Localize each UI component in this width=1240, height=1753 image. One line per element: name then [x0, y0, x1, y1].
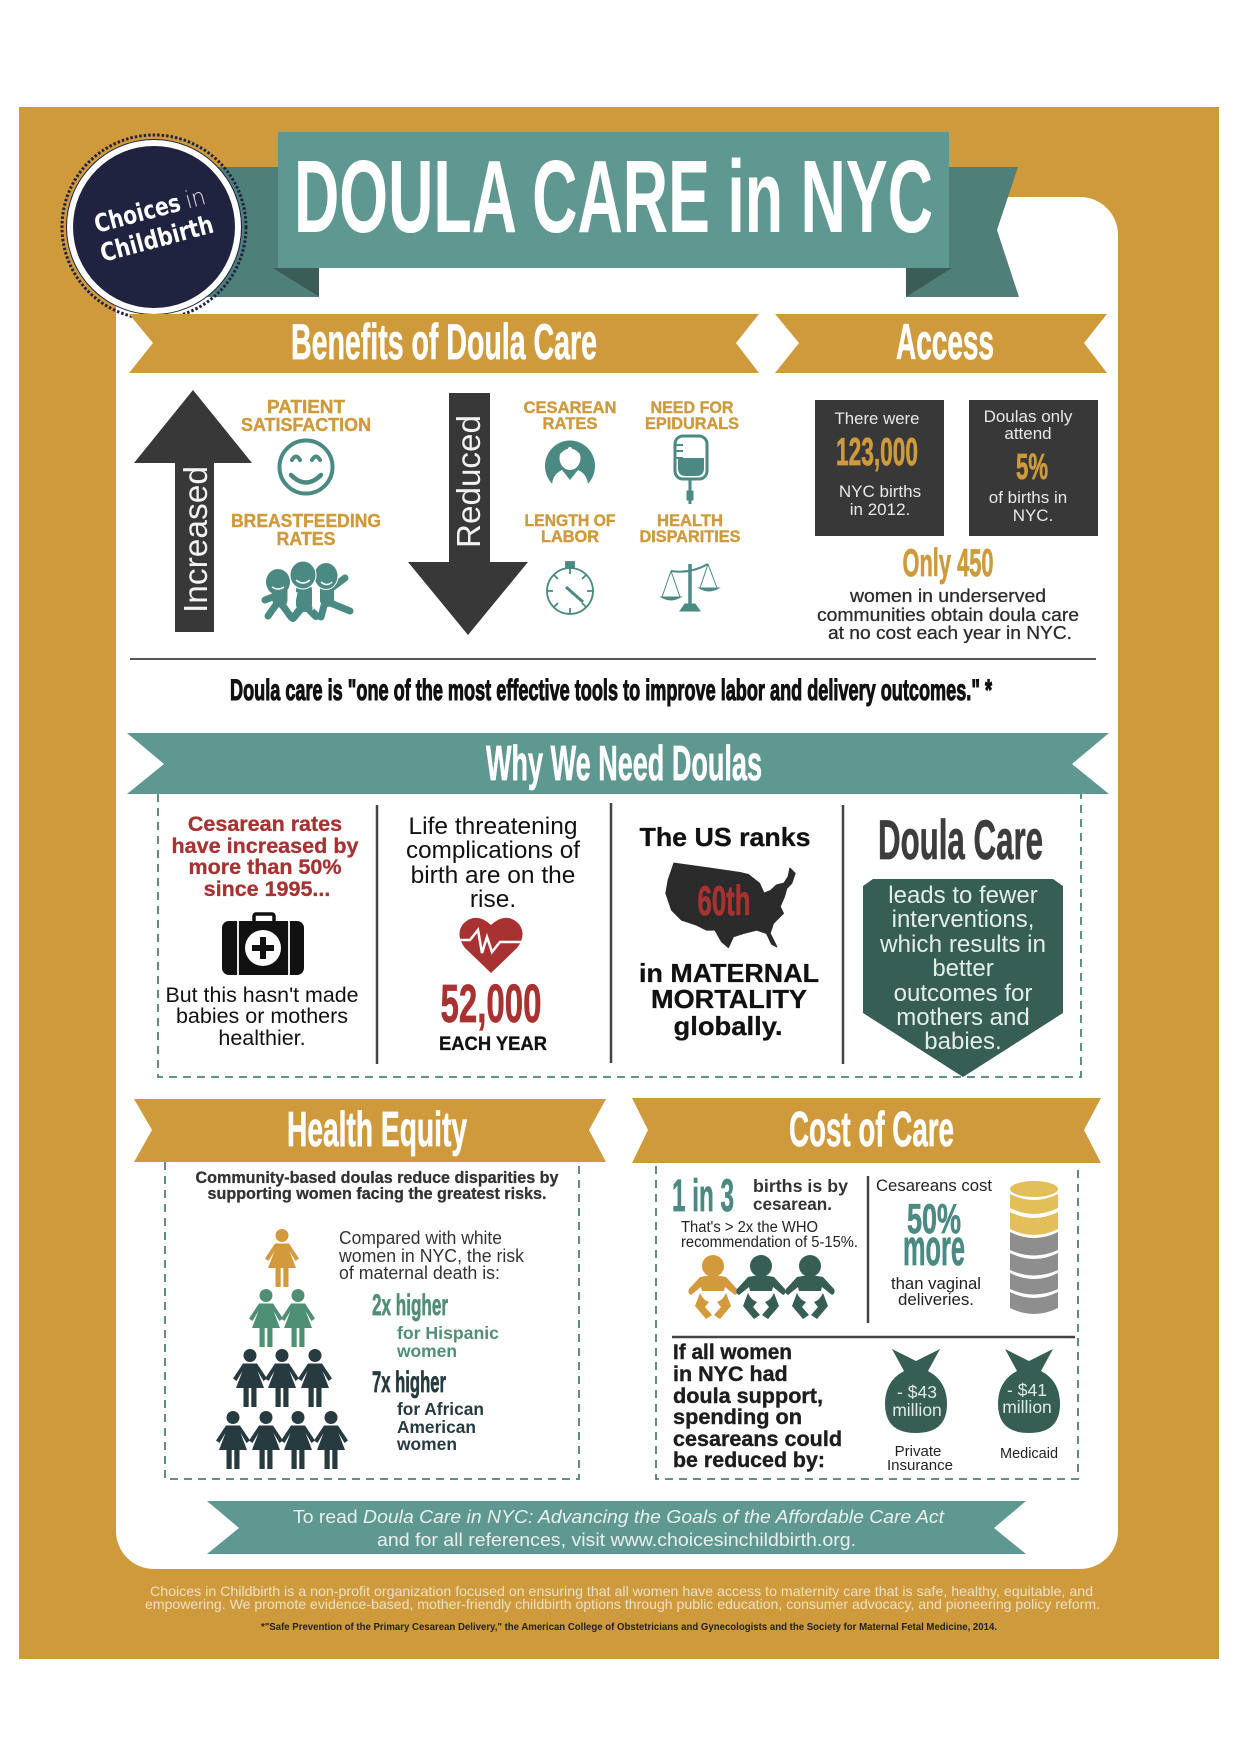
- left ribbon tail: [200, 167, 319, 297]
- comparison text: of maternal death is:: [339, 1263, 500, 1283]
- logo: Choices in Childbirth: Choices: [91, 188, 184, 239]
- logo: Choices in Childbirth: in: [182, 182, 209, 214]
- label: breastfeeding rates: RATES: [276, 529, 336, 549]
- white content panel: [116, 197, 1118, 1569]
- column: doula care shield: babies.: [924, 1028, 1002, 1055]
- heading ribbon: why we need doulas: Why We Need Doulas: [486, 737, 762, 791]
- stat: only 450: women in underserved: [849, 585, 1046, 606]
- column: US ranks 60th: MORTALITY: [651, 984, 807, 1014]
- stat box: 123,000 births: NYC births: [839, 482, 921, 501]
- icon: doctor: [545, 440, 595, 492]
- label: need for epidurals: NEED FOR: [650, 399, 734, 417]
- label: length of labor: LENGTH OF: [524, 512, 616, 530]
- money bag: private insurance: million: [892, 1400, 942, 1420]
- money bag: medicaid: million: [1002, 1397, 1052, 1417]
- call to action ribbon: and for all references, visit www.choicesinchildbirth.org.: [377, 1529, 856, 1550]
- stat box: 5 percent: [969, 400, 1098, 536]
- heading ribbon: access: [775, 314, 1107, 373]
- left ribbon fold: [272, 268, 319, 297]
- money bag: private insurance: Private: [895, 1443, 941, 1460]
- icon: coin stack: [1010, 1181, 1058, 1314]
- label: breastfeeding rates: [231, 511, 381, 549]
- stat: 50 percent more: than vaginal: [891, 1275, 981, 1293]
- map: United States: [666, 863, 795, 947]
- stat: only 450: at no cost each year in NYC.: [828, 622, 1072, 643]
- stat: 50 percent more: Cesareans cost: [876, 1177, 992, 1195]
- stat: 2x higher: for Hispanic: [397, 1323, 499, 1343]
- stat box: 123,000 births: There were: [834, 409, 920, 428]
- column: US ranks 60th: The US ranks: [640, 822, 810, 852]
- logo: Choices in Childbirth: [62, 135, 246, 319]
- title banner: [200, 132, 1019, 297]
- stat: 1 in 3: recommendation of 5-15%.: [681, 1234, 858, 1251]
- savings text: If all women: [673, 1340, 792, 1364]
- label: health disparities: HEALTH: [657, 512, 723, 530]
- stat box: 5 percent: NYC.: [1013, 506, 1053, 525]
- column: US ranks 60th: in MATERNAL: [639, 958, 819, 988]
- intro text: [196, 1169, 559, 1203]
- title plate: [278, 132, 949, 268]
- stat: 50 percent more: 50%: [907, 1195, 961, 1242]
- stat: 1 in 3: That's > 2x the WHO: [681, 1219, 818, 1236]
- panel: why we need doulas: [127, 733, 1109, 1077]
- column: doula care shield: [863, 808, 1063, 1077]
- stat box: 123,000 births: [815, 400, 944, 536]
- money bag: medicaid: - $41: [1007, 1380, 1047, 1400]
- heading ribbon: health equity: [134, 1099, 606, 1162]
- column: cesarean rates increased: more than 50%: [189, 855, 341, 879]
- stat box: 5 percent: Doulas only: [984, 407, 1073, 426]
- stat: only 450: communities obtain doula care: [817, 604, 1079, 625]
- footer text: [145, 1583, 1100, 1633]
- stat: only 450: Only 450: [902, 542, 994, 585]
- column: doula care shield: interventions,: [892, 906, 1034, 933]
- column: complications: [406, 813, 580, 1055]
- stat: 50 percent more: deliveries.: [898, 1291, 974, 1309]
- stat box: 123,000 births: in 2012.: [850, 500, 910, 519]
- footer text: empowering. We promote evidence-based, mother-friendly childbirth options through public education, consumer advocacy, and pioneering policy reform.: [145, 1596, 1100, 1612]
- call to action ribbon: [207, 1501, 1026, 1554]
- panel: benefits of doula care: [129, 314, 759, 635]
- stat: 1 in 3: cesarean.: [753, 1194, 832, 1214]
- stat: 1 in 3: 1 in 3: [672, 1170, 734, 1221]
- stat: 7x higher: women: [396, 1434, 457, 1454]
- icon: IV bag: [675, 436, 707, 504]
- column: US ranks 60th: globally.: [674, 1011, 782, 1041]
- label: health disparities: [640, 512, 740, 546]
- column: doula care shield: which results in: [879, 931, 1046, 958]
- heading ribbon: cost of care: [632, 1098, 1101, 1163]
- stat: 1 in 3: births is by: [753, 1176, 848, 1196]
- icon: first aid kit: [222, 914, 304, 975]
- column: doula care shield: outcomes for: [894, 980, 1032, 1007]
- label: patient satisfaction: SATISFACTION: [241, 415, 371, 435]
- stat: 2x higher: 2x higher: [372, 1289, 448, 1322]
- pictogram: women pyramid: [216, 1229, 348, 1469]
- stat box: 5 percent: 5%: [1016, 446, 1048, 487]
- money bag: private insurance: Insurance: [887, 1457, 953, 1474]
- intro text: supporting women facing the greatest risks.: [208, 1185, 546, 1203]
- stat: 7x higher: [372, 1366, 484, 1454]
- savings text: cesareans could: [673, 1427, 842, 1451]
- arrow: reduced: [408, 393, 528, 635]
- stat: 7x higher: 7x higher: [372, 1366, 446, 1399]
- column: doula care shield: better: [932, 955, 994, 982]
- column: cesarean rates increased: have increased by: [172, 834, 359, 858]
- column: complications: Life threatening: [409, 813, 577, 840]
- icon: heart with pulse: [459, 918, 523, 973]
- column: cesarean rates increased: babies or mothers: [176, 1004, 348, 1028]
- stat: 50 percent more: [876, 1177, 992, 1309]
- savings text: doula support,: [673, 1384, 823, 1408]
- stat: 7x higher: for African: [397, 1399, 484, 1419]
- stat: 7x higher: American: [397, 1417, 476, 1437]
- panel: cost of care: [632, 1098, 1101, 1479]
- stat: 50 percent more: more: [903, 1219, 965, 1276]
- icon: scales: [661, 564, 719, 611]
- heading ribbon: why we need doulas: [127, 733, 1109, 794]
- pictogram: three babies: [688, 1255, 835, 1319]
- icon: smiley face: [280, 440, 332, 494]
- money bag: medicaid: Medicaid: [1000, 1445, 1058, 1462]
- footer text: Choices in Childbirth is a non-profit organization focused on ensuring that all women have access to maternity care that is safe, healthy, equitable, and: [150, 1583, 1093, 1599]
- column: complications: 52,000: [440, 974, 542, 1034]
- arrow: reduced: Reduced: [450, 415, 487, 548]
- savings text: spending on: [673, 1405, 802, 1429]
- comparison text: [338, 1228, 525, 1283]
- logo: Choices in Childbirth: Childbirth: [97, 210, 217, 268]
- label: health disparities: DISPARITIES: [640, 528, 740, 546]
- shield: [863, 879, 1063, 1077]
- icon: children: [265, 561, 350, 618]
- call to action ribbon: To read Doula Care in NYC: Advancing the Goals of the Affordable Care Act: [293, 1506, 945, 1527]
- column: US ranks 60th: 60th: [698, 877, 750, 924]
- money bag: private insurance: [885, 1349, 953, 1474]
- column: US ranks 60th: [639, 822, 819, 1041]
- comparison text: Compared with white: [339, 1228, 502, 1248]
- label: patient satisfaction: [241, 397, 371, 435]
- label: need for epidurals: EPIDURALS: [645, 415, 739, 433]
- stat: 1 in 3: [672, 1170, 858, 1251]
- label: patient satisfaction: PATIENT: [267, 397, 345, 417]
- comparison text: women in NYC, the risk: [338, 1246, 525, 1266]
- intro text: Community-based doulas reduce disparities by: [196, 1169, 559, 1187]
- heading ribbon: access: Access: [896, 314, 994, 370]
- column: complications: EACH YEAR: [439, 1033, 547, 1055]
- footer text: *"Safe Prevention of the Primary Cesarean Delivery," the American College of Obstetricians and Gynecologists and the Society for Maternal Fetal Medicine, 2014.: [261, 1621, 997, 1633]
- stat: 2x higher: [372, 1289, 499, 1361]
- stat box: 5 percent: of births in: [989, 488, 1067, 507]
- column: cesarean rates increased: [166, 812, 359, 1050]
- heading ribbon: benefits: [129, 314, 759, 373]
- label: cesarean rates: [524, 399, 616, 433]
- column: cesarean rates increased: since 1995...: [204, 877, 330, 901]
- label: need for epidurals: [645, 399, 739, 433]
- panel: health equity: [134, 1099, 606, 1479]
- column: cesarean rates increased: Cesarean rates: [188, 812, 342, 836]
- heading ribbon: health equity: Health Equity: [287, 1103, 467, 1157]
- arrow: increased: Increased: [178, 466, 215, 613]
- icon: stopwatch: [547, 562, 593, 614]
- label: breastfeeding rates: BREASTFEEDING: [231, 511, 381, 531]
- right ribbon tail: [906, 167, 1019, 297]
- label: cesarean rates: RATES: [542, 415, 598, 433]
- column: complications: complications of: [406, 837, 580, 864]
- savings text: [673, 1340, 842, 1472]
- money bag: private insurance: - $43: [897, 1382, 937, 1402]
- column: complications: birth are on the: [411, 862, 575, 889]
- label: length of labor: [524, 512, 616, 546]
- heading ribbon: benefits: Benefits of Doula Care: [291, 314, 597, 370]
- right ribbon fold: [906, 268, 952, 297]
- savings text: in NYC had: [673, 1362, 788, 1386]
- arrow: increased: [134, 390, 252, 632]
- panel: access: [775, 314, 1107, 643]
- stat box: 123,000 births: 123,000: [836, 431, 918, 474]
- savings text: be reduced by:: [673, 1448, 825, 1472]
- label: length of labor: LABOR: [541, 528, 599, 546]
- label: cesarean rates: CESAREAN: [524, 399, 616, 417]
- column: complications: rise.: [470, 886, 516, 913]
- column: doula care shield: Doula Care: [878, 808, 1043, 871]
- stat: only 450: [817, 542, 1079, 643]
- stat box: 5 percent: attend: [1004, 424, 1052, 443]
- stat: 2x higher: women: [396, 1341, 457, 1361]
- column: doula care shield: leads to fewer: [888, 882, 1038, 909]
- heading ribbon: cost of care: Cost of Care: [789, 1103, 954, 1157]
- money bag: medicaid: [998, 1349, 1060, 1462]
- column: cesarean rates increased: But this hasn't made: [166, 983, 358, 1007]
- column: cesarean rates increased: healthier.: [218, 1026, 306, 1050]
- column: doula care shield: mothers and: [896, 1004, 1030, 1031]
